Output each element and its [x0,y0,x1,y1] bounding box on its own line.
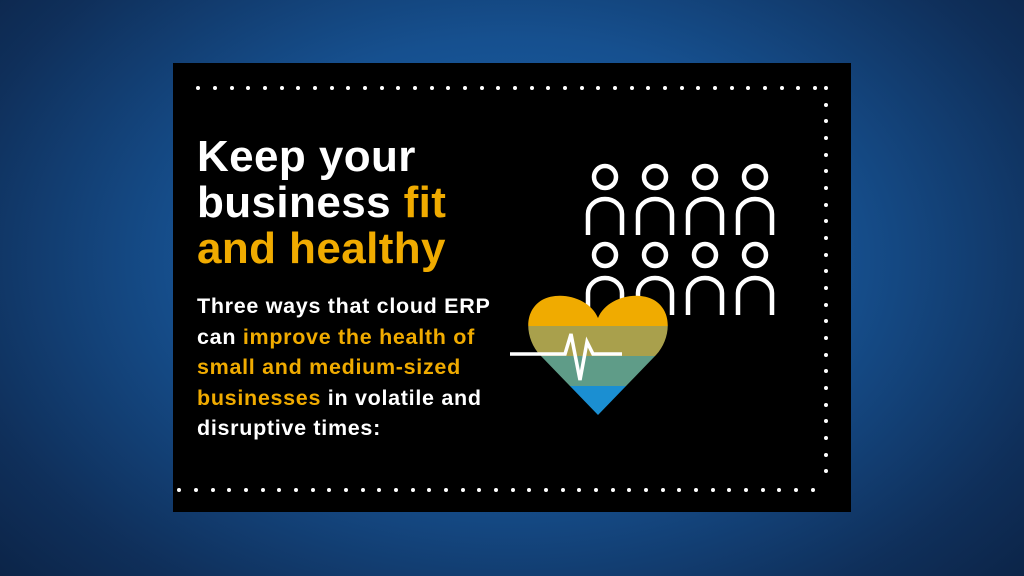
subtitle text [197,294,490,440]
subtitle text: Three ways that cloud ERP [197,294,490,318]
panel: black card [173,63,851,512]
title: business fit [197,178,446,227]
subtitle text: disruptive times: [197,416,381,440]
title: Keep your [197,132,416,181]
subtitle text: businesses in volatile and [197,386,482,410]
title [197,132,446,273]
subtitle text: small and medium-sized [197,355,461,379]
icon: striped heart with pulse [510,296,668,415]
subtitle text: can improve the health of [197,324,475,348]
title: and healthy [197,224,446,273]
icon: people grid [588,166,772,315]
